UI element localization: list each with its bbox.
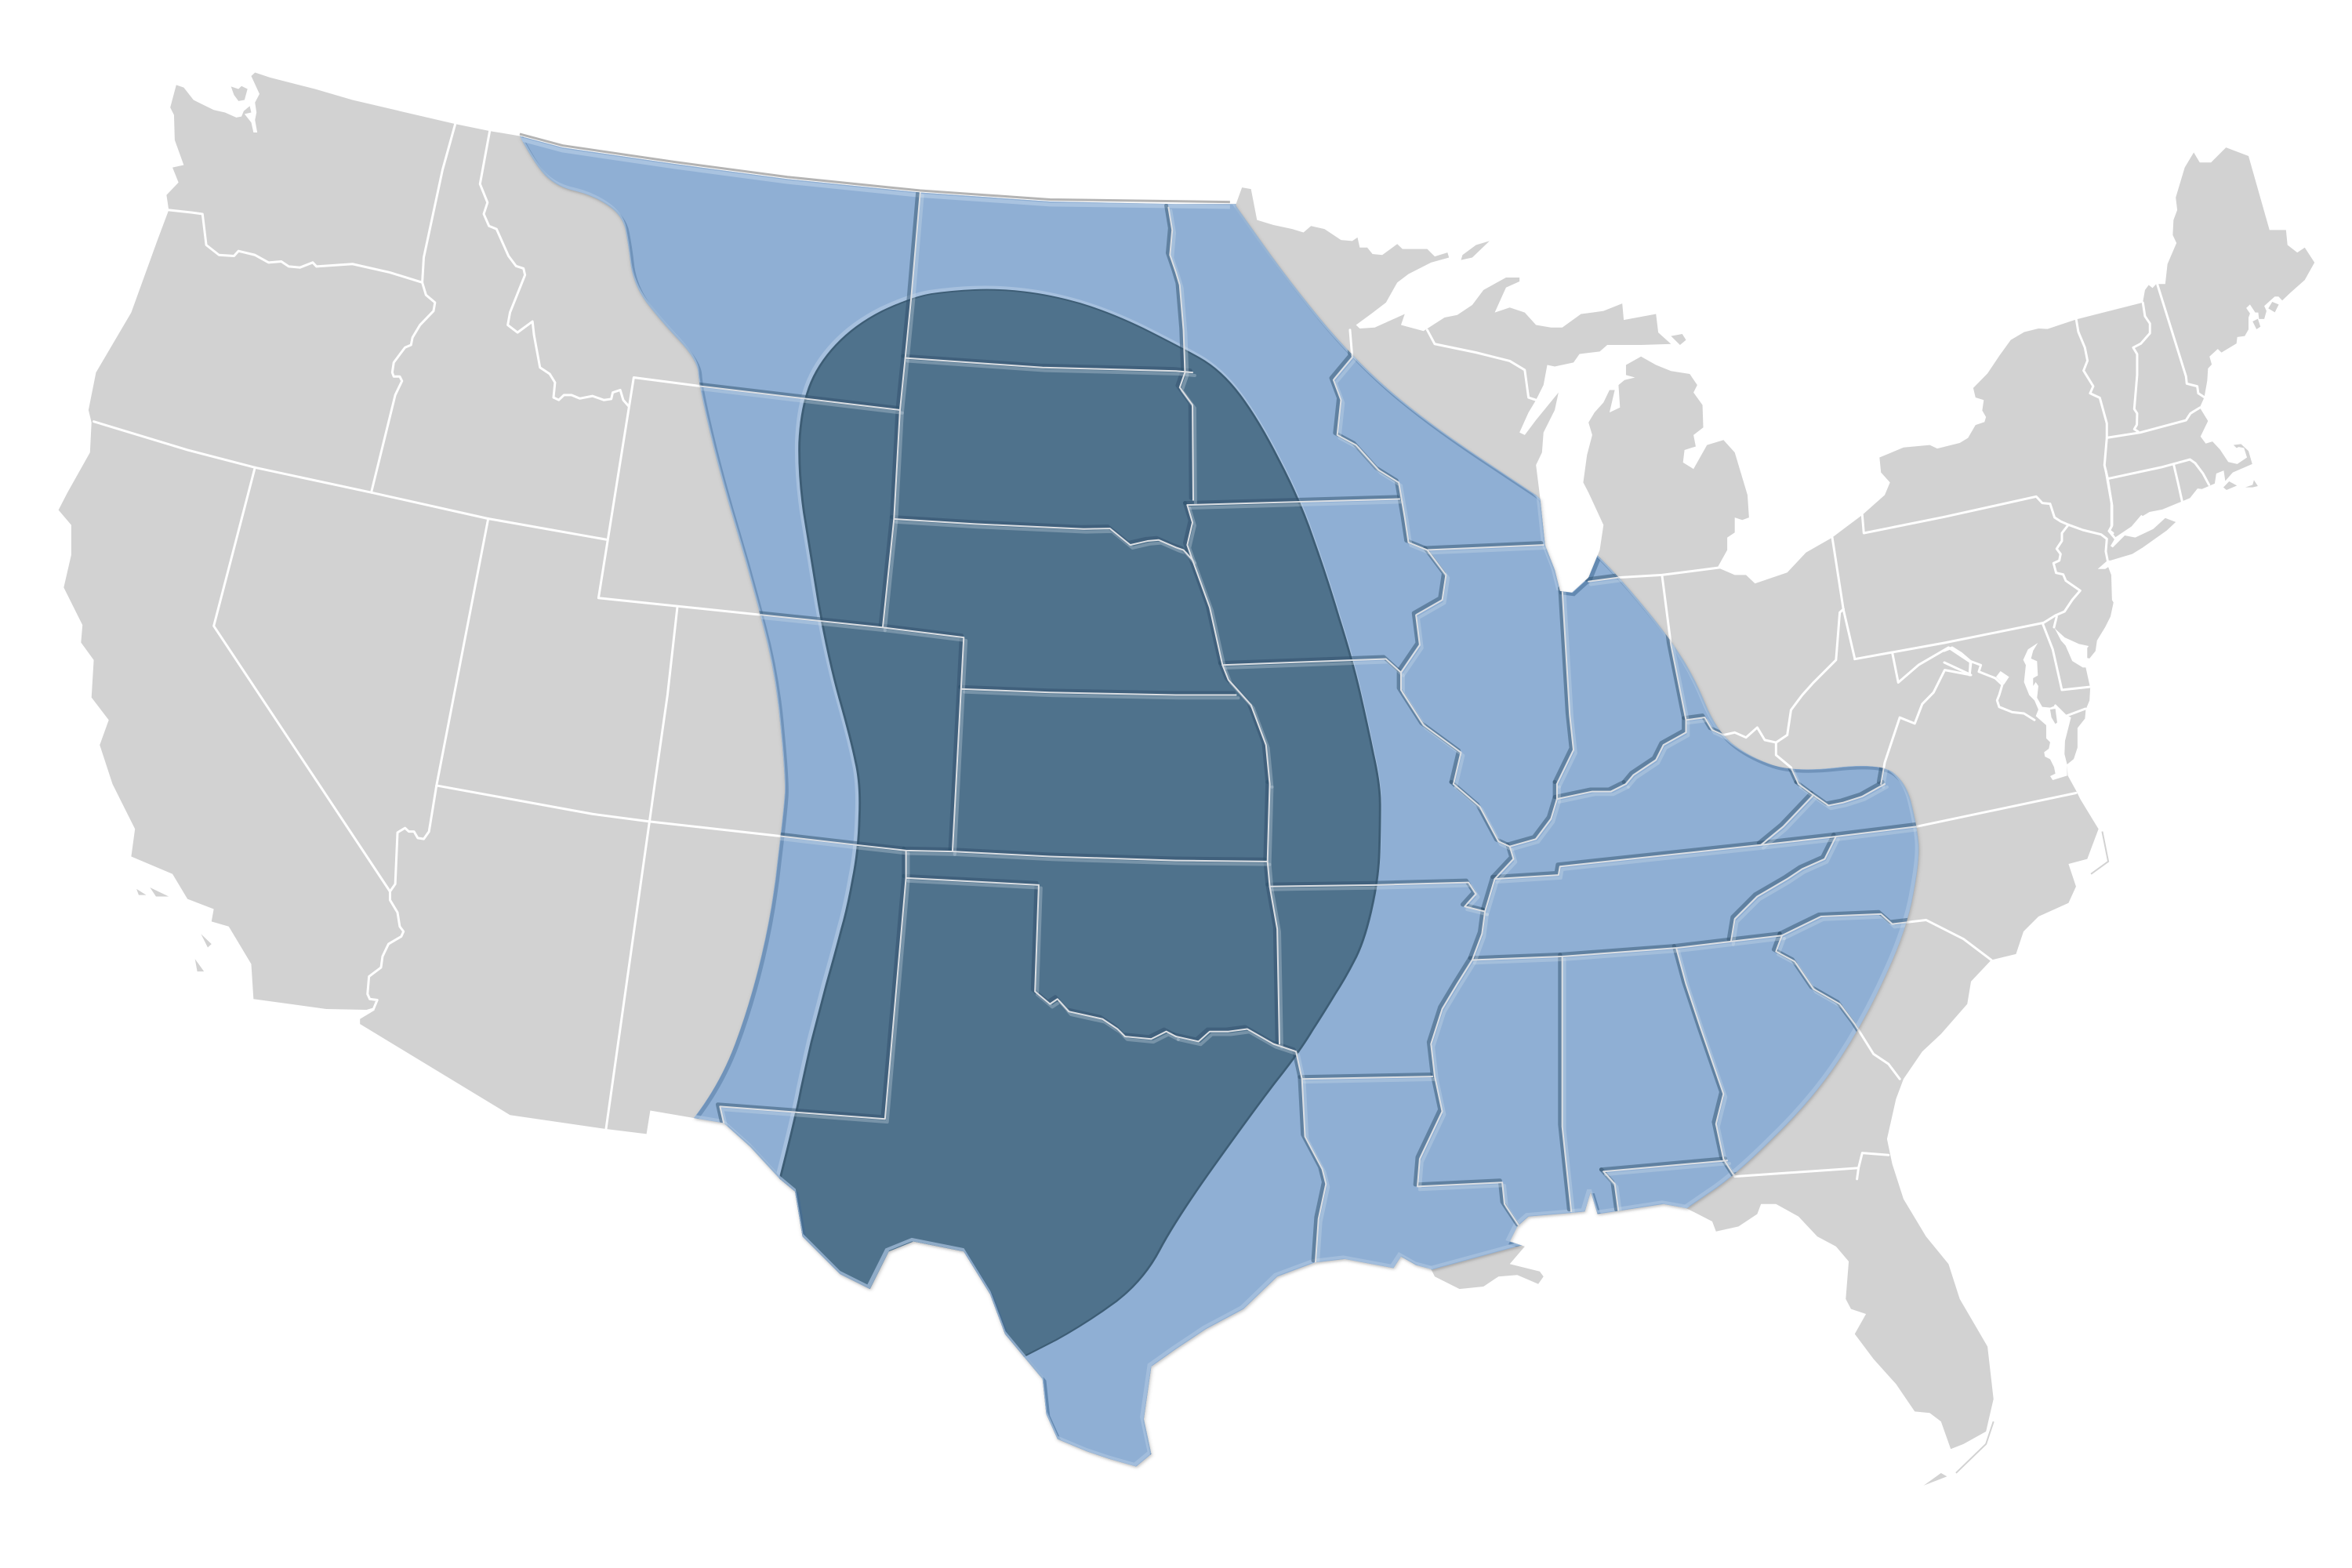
Chesapeake Bay water — [1996, 643, 2071, 780]
thin barrier islands and keys — [1956, 832, 2108, 1473]
grey rim along northern border of the shaded region — [520, 134, 1230, 202]
bevelled region edges — [520, 136, 1919, 1466]
region: dark blue — [749, 288, 1380, 1400]
white state borders — [94, 124, 2209, 1262]
shaded region group with shadow — [520, 136, 1921, 1469]
state borders bevel — [520, 136, 1918, 1466]
region: light blue — [520, 100, 1918, 1550]
